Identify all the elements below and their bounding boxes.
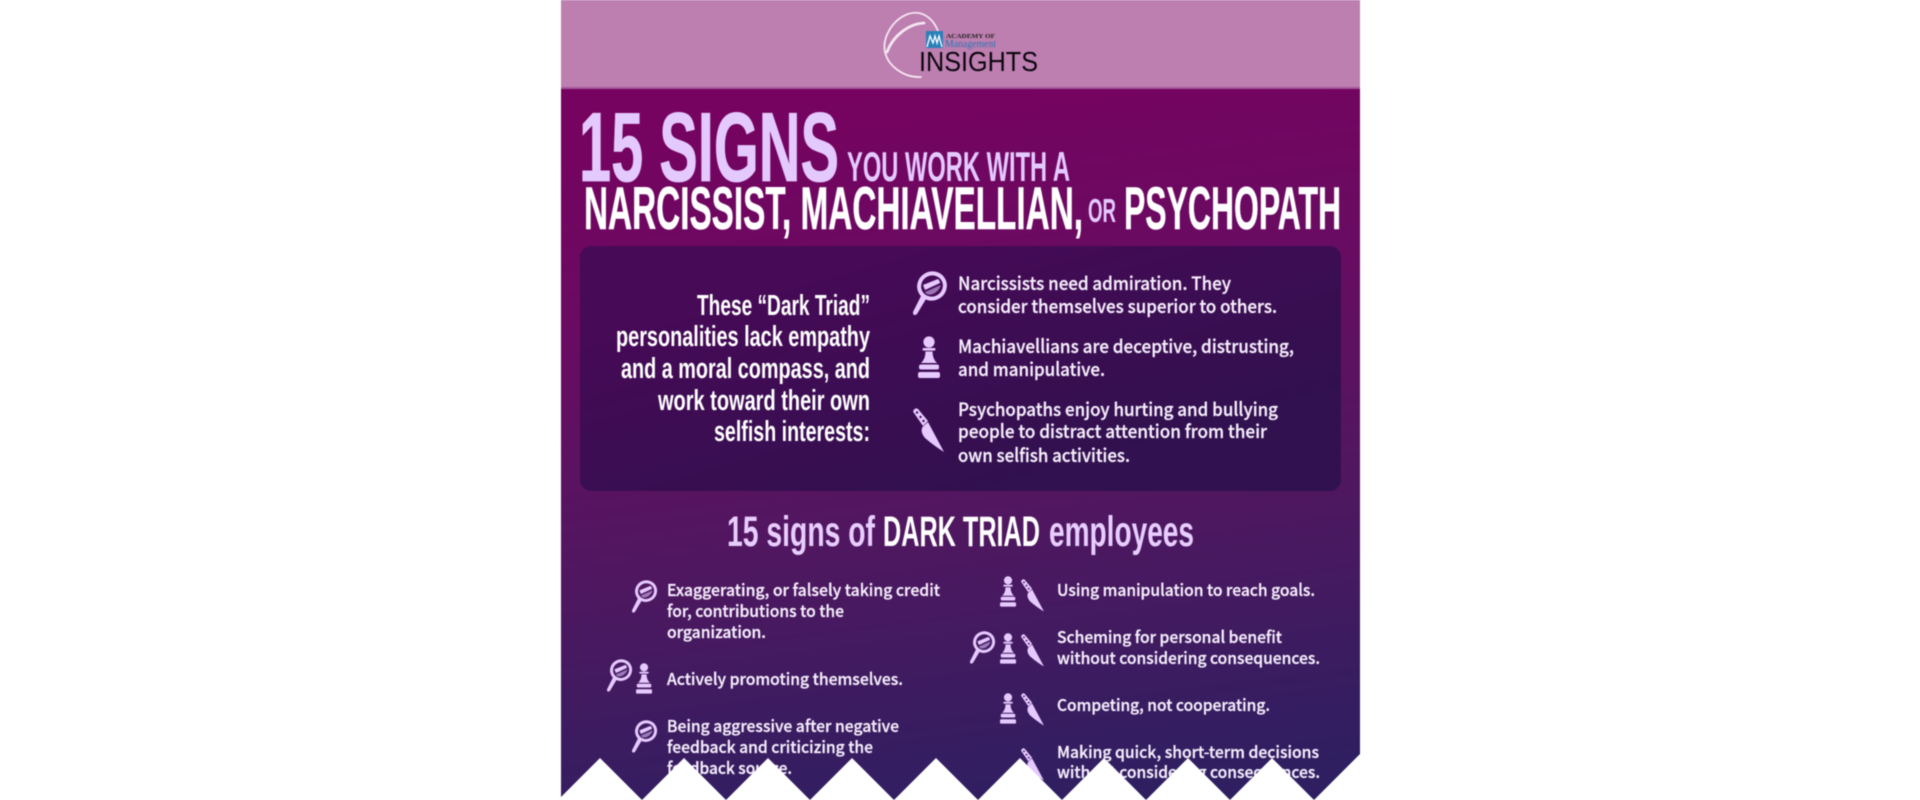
sign: manipulation	[1000, 576, 1315, 612]
logo emblem	[926, 31, 943, 48]
section heading: 15 signs of	[727, 508, 875, 556]
sign: quick decisions	[1021, 739, 1320, 783]
title: YOU WORK WITH A	[847, 143, 1070, 190]
sign: quick decisions: Making quick, short-term decisions	[1057, 739, 1319, 763]
title: NARCISSIST, MACHIAVELLIAN,	[584, 175, 1083, 242]
sign: exaggerating: Exaggerating, or falsely taking credit	[667, 577, 940, 601]
header band with logo	[561, 0, 1360, 89]
icon: knife	[913, 408, 944, 452]
logo insights text: INSIGHTS	[919, 46, 1038, 77]
machiavellians text: Machiavellians are deceptive, distrusting,	[958, 333, 1294, 359]
psychopaths text	[958, 396, 1278, 468]
section heading: employees	[1049, 508, 1194, 556]
machiavellians text	[958, 333, 1294, 382]
psychopaths text: people to distract attention from their	[958, 418, 1267, 444]
logo arcs	[884, 13, 938, 77]
intro text: These “Dark Triad”	[697, 290, 870, 322]
torn zigzag bottom edge	[558, 754, 1360, 800]
intro text: selfish interests:	[714, 416, 870, 448]
title: OR	[1088, 192, 1116, 229]
panel: dark triad definitions	[580, 246, 1341, 491]
icon: pawn	[918, 336, 940, 378]
machiavellians text: and manipulative.	[958, 356, 1105, 382]
sign: aggressive: Being aggressive after negative	[667, 713, 899, 737]
icon: mirror	[913, 269, 950, 315]
logo academy text: ACADEMY OF	[946, 34, 995, 40]
sign: scheming	[970, 624, 1320, 669]
narcissists text: Narcissists need admiration. They	[958, 270, 1231, 296]
narcissists text	[958, 270, 1277, 319]
sign: manipulation: Using manipulation to reach goals.	[1057, 577, 1315, 601]
sign: quick decisions: without considering consequences.	[1057, 759, 1320, 783]
sign: scheming: Scheming for personal benefit	[1057, 624, 1282, 648]
title: PSYCHOPATH	[1124, 175, 1341, 242]
psychopaths text: own selfish activities.	[958, 442, 1130, 468]
logo management text: Management	[945, 38, 996, 50]
sign: aggressive	[632, 713, 899, 779]
page background panel	[561, 88, 1360, 800]
sign: aggressive: feedback and criticizing the	[667, 734, 873, 758]
psychopaths text: Psychopaths enjoy hurting and bullying	[958, 396, 1278, 422]
narcissists text: consider themselves superior to others.	[958, 293, 1277, 319]
sign: exaggerating	[632, 577, 940, 643]
section heading: DARK TRIAD	[883, 508, 1040, 556]
intro text: personalities lack empathy	[616, 321, 870, 353]
sign: exaggerating: for, contributions to the	[667, 598, 844, 622]
sign: competing	[1000, 692, 1270, 726]
sign: aggressive: feedback source.	[667, 755, 792, 779]
intro text: and a moral compass, and	[621, 353, 870, 385]
intro text: work toward their own	[657, 385, 870, 417]
title: 15 SIGNS	[579, 92, 839, 202]
sign: promoting	[607, 657, 903, 694]
sign: exaggerating: organization.	[667, 619, 766, 643]
section heading	[727, 508, 1194, 556]
intro text	[616, 290, 870, 448]
sign: competing: Competing, not cooperating.	[1057, 692, 1270, 716]
sign: promoting: Actively promoting themselves.	[667, 666, 903, 690]
sign: scheming: without considering consequences.	[1057, 645, 1320, 669]
title	[579, 92, 1341, 242]
